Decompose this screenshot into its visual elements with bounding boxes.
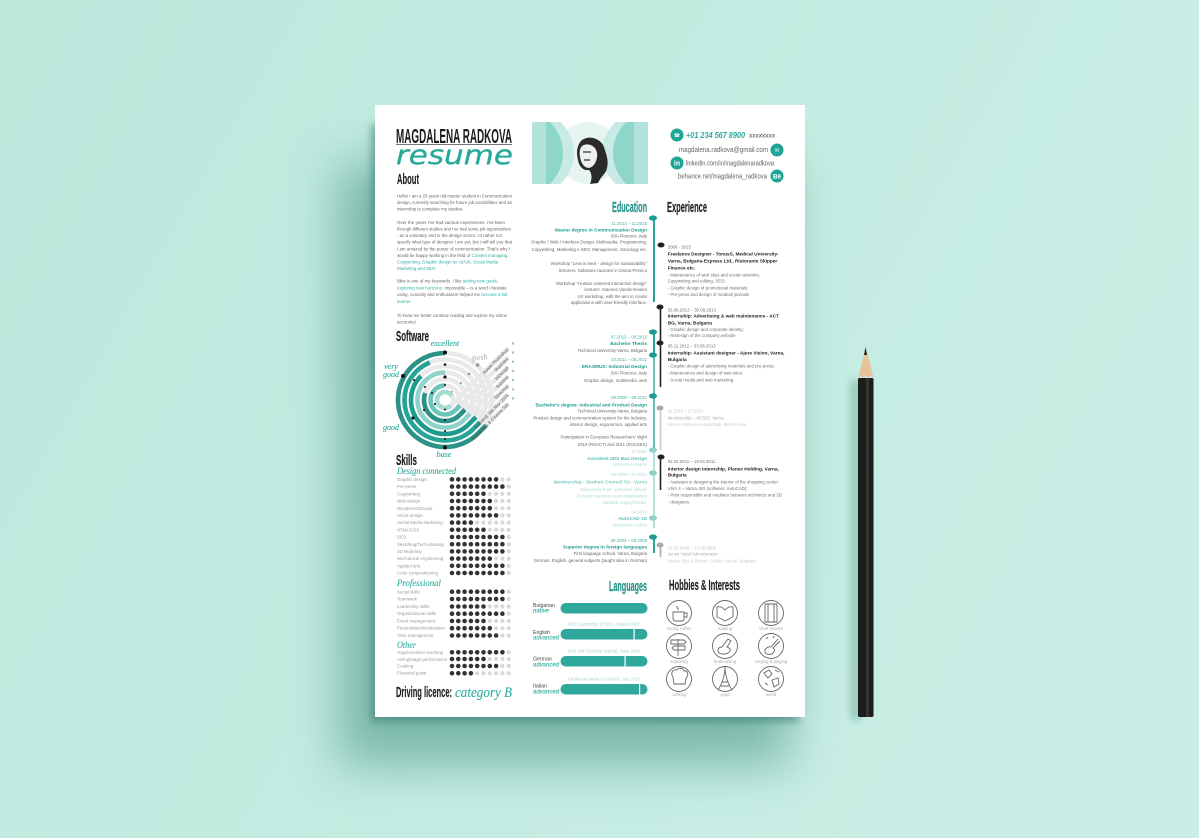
languages bars: DSd-SaF (Goethe Institut), June 2008: [568, 648, 641, 654]
experience entries: 03.06.2013 – 30.09.2013: [668, 307, 717, 312]
icon: portrait silhouette: [577, 138, 608, 184]
experience entries: BG, Varna, Bulgaria: [668, 320, 712, 326]
hobbies icon grid: yoga: [720, 692, 730, 697]
radial software chart: Sublime: [495, 374, 510, 389]
skills list: design connected: Social Media Marketing: [397, 520, 443, 525]
radial software chart: good: [383, 370, 400, 379]
radial software chart: [379, 334, 514, 466]
text block: about: - as a voluntary and in the design sector. I'd rather not: [397, 233, 503, 238]
text block: about: using, curiosity and enthusiasm helped me become a full: [397, 292, 507, 297]
skills list: design connected: Web design: [397, 499, 421, 504]
pencil: [850, 347, 874, 720]
title: resume script: resume: [396, 140, 513, 171]
skills list: design connected: Pre-press: [397, 484, 417, 489]
skills list: design connected: [397, 477, 509, 576]
languages bars: native: [533, 608, 550, 614]
skills list: other: Acting/stage performance: [397, 657, 448, 662]
contact details: behance.net/magdalena_radkova: [678, 174, 767, 180]
text block: about: accounts!: [397, 320, 416, 324]
skills list: professional: Presentation/moderation: [397, 626, 445, 631]
experience entries: VIVA 4 – Varna, BG (software: AutoCAD);: [668, 486, 747, 491]
education entries: Interactive course: [613, 523, 648, 528]
languages bars: FAE Cambridge (ESOL), August 2007: [568, 622, 641, 626]
experience entries: Internship: Advertising & web maintenance - ACT: [668, 314, 779, 320]
education entries: interior design, ergonomics, applied arts: [570, 422, 648, 427]
education entries: Participation in European Researchers' Night: [560, 435, 648, 440]
subheading: other: Other: [397, 641, 416, 651]
radial software chart: very: [384, 362, 398, 371]
hobbies icon grid: [666, 600, 788, 697]
hobbies icon grid: beatmaking: [714, 659, 737, 664]
contact details: Bē: [773, 174, 782, 180]
icon: eiffel tower: [718, 667, 732, 690]
radial software chart: InDesign: [494, 365, 510, 381]
education entries: Superior degree in foreign languages: [563, 545, 647, 551]
education entries: lecturer: Joannes Vandermeulen: [585, 287, 648, 292]
heading: Skills: Skills: [396, 452, 417, 469]
skills list: professional: Leadership skills: [397, 604, 430, 609]
education entries: Bachelor's degree: Industrial and Product Design: [536, 403, 647, 409]
text block: about: exploring new horizons. Impossible – is a word I hesitate: [397, 286, 507, 291]
radial software chart: good: [383, 423, 400, 432]
experience entries: 2008 - 2015: [668, 245, 691, 250]
education entries: Graphic / Web / Interface Design, Multimedia, Programming,: [531, 240, 647, 245]
education entries: Technical University-Varna, Bulgaria: [578, 409, 648, 414]
portrait graphic: [532, 122, 648, 184]
languages bars: advanced: [533, 636, 560, 642]
skills list: professional: Social skills: [397, 589, 420, 594]
icon: guitar: [765, 636, 780, 654]
education entries: [531, 221, 648, 563]
education entries: Interactive course: [613, 462, 648, 467]
subheading: design connected: Design connected: [396, 467, 456, 477]
education entries: Membership - Student Council TU - Varna: [554, 480, 647, 486]
text block: about: Bbw is one of my keywords; I like setting new goals,: [397, 279, 498, 284]
experience entries: Bulgaria: [668, 357, 687, 363]
skills list: professional: Event management: [397, 618, 436, 624]
languages bars: German: [533, 656, 552, 662]
skills list: professional: [397, 589, 509, 638]
icon: chef hat: [672, 668, 688, 684]
experience entries: - Print responsible and mediator between architects and 3D: [668, 493, 782, 498]
education entries: ERASMUS: Industrial Design: [582, 364, 647, 370]
radial software chart: Illustrator: [493, 356, 510, 372]
skills list: design connected: Wordpress/Drupal: [397, 506, 432, 511]
education entries: Workshop "Less is Next - design for sustainability": [551, 261, 647, 266]
hobbies icon grid: strong coffee: [667, 626, 692, 631]
heading: Hobbies and Interests: Hobbies & Interests: [669, 577, 740, 594]
heading: About: About: [397, 171, 419, 188]
education entries: lecturers: Salvatore Iaconesi e Oriana Persico: [559, 268, 648, 273]
contact details: [670, 128, 784, 182]
skills list: other: Yoga/Aerobics teaching: [397, 650, 444, 655]
radial software chart: fresh: [471, 352, 488, 363]
hobbies icon grid: world: [766, 692, 777, 697]
experience entries: [668, 245, 784, 564]
experience entries: - Assistant in designing the interior of the shopping center: [668, 480, 779, 485]
experience entries: Finance etc.: [668, 265, 695, 271]
skills list: design connected: Color compositioning: [397, 571, 439, 576]
text block: about: design, currently searching for future job possibilities and an: [397, 200, 513, 205]
education entries: Copywriting, Marketing e SEO, Management, Sociology etc.: [532, 247, 647, 252]
icon: signpost: [671, 639, 686, 656]
title: name: [396, 126, 512, 148]
skills list: design connected: HTML/CSS: [397, 527, 419, 532]
skills list: design connected: 3D Modeling: [397, 549, 422, 554]
education entries: 07.2011: [632, 449, 648, 454]
contact details: +01 234 567 8900: [686, 130, 745, 140]
education entries: applications with user-friendly interface.: [571, 300, 647, 305]
skills list: design connected: Mechanical engineering: [397, 556, 444, 561]
experience entries: Bulgaria: [668, 472, 687, 478]
text: Languages: [609, 578, 647, 595]
education entries: Product design and communication system for the industry,: [533, 416, 647, 421]
languages bars: Certificate Aveta A1 (UniFi), July 2012: [568, 676, 641, 682]
text block: about: [397, 194, 513, 324]
education entries: Master degree in Communication Design: [555, 228, 647, 234]
education entries: 07.2012 – 09.2012: [611, 335, 648, 340]
education entries: Graphic design, multimedia, web: [584, 378, 648, 383]
experience entries: Copywriting and editing, SEO;: [668, 279, 726, 284]
experience entries: Interior design internship, Planex Holding, Varna,: [668, 466, 779, 472]
skills list: other: Cooking: [397, 664, 414, 669]
text: Education: [612, 199, 647, 216]
driving licence: Driving licence:: [396, 684, 452, 701]
skills list: design connected: UI/UX design: [397, 513, 423, 518]
education entries: 09.2008 – 09.2011: [611, 395, 648, 400]
hobbies icon grid: exploring: [670, 659, 688, 664]
text block: about: I am amazed by the power of communication. That's why I: [397, 246, 510, 251]
text block: about: Copywriting, Graphic design for UI/UX, Social Media: [397, 260, 499, 265]
icon: instrument: [718, 639, 731, 654]
hobbies icon grid: short movies: [759, 626, 783, 631]
text: MAGDALENA RADKOVA: [396, 126, 512, 148]
education entries: Autodesk 3DS Max Design: [587, 456, 647, 462]
skills list: other: [397, 650, 509, 676]
languages bars: Bulgarian: [533, 603, 555, 609]
hobbies icon grid: reading: [718, 626, 733, 631]
subheading: professional: Professional: [396, 578, 441, 589]
experience entries: - Pre-press and design of medical journals: [668, 292, 750, 297]
driving licence: category B: [455, 685, 512, 701]
contact details: ☎: [674, 133, 680, 139]
experience entries: - designers: [668, 499, 690, 504]
education entries: ISIA Florence, Italy: [611, 371, 648, 376]
education entries: Workshop "Human centered interaction design": [556, 281, 647, 286]
education entries: 2010 (RSACT) and 2011 (RSCSES): [578, 442, 648, 447]
experience entries: 02.02.2011 – 19.04.2011: [668, 459, 716, 464]
education entries: 10.2011 – 08.2012: [611, 357, 648, 362]
text block: about: To know me better continue reading and explore my online: [397, 313, 508, 318]
contact details: xxxxxxxx: [749, 134, 775, 140]
experience entries: Internship: Assistant designer - Ajure Vision, Varna,: [668, 351, 784, 357]
hobbies icon grid: cooking: [672, 692, 687, 697]
experience entries: - Graphic design and corporate identity;: [668, 327, 744, 332]
hobbies icon grid: singing & playing: [755, 659, 788, 664]
radial software chart: Adobe Photoshop: [481, 347, 510, 375]
experience entries: Varna, Bulgaria-Express Ltd., Ristorante Skipper: [668, 259, 777, 265]
text block: about: would be happy working in the field of Content managing,: [397, 253, 509, 258]
heading: Software: Software: [396, 328, 429, 345]
education timeline: [649, 215, 657, 553]
skills list: professional: Organizational skills: [397, 611, 437, 616]
contact details: ✉: [775, 148, 780, 154]
skills list: design connected: Sketching/Tech-drawing: [397, 542, 444, 547]
education entries: Material, supply/shelter: [602, 500, 648, 505]
radial software chart: excellent: [431, 339, 460, 348]
education entries: 11.2013 – 11.2015: [611, 221, 648, 226]
education entries: First language school, Varna, Bulgaria: [574, 551, 648, 556]
text block: about: Over the years I've had various experiences. I've been: [397, 220, 506, 225]
experience entries: 11.2010 – 07.2011: [668, 409, 704, 414]
languages bars: English: [533, 630, 550, 636]
skills list: professional: Time management: [397, 633, 434, 638]
experience entries: - Graphic design of advertising materials and pre-press;: [668, 364, 775, 369]
skills list: other: Classical guitar: [397, 671, 427, 676]
icon: film: [765, 604, 777, 622]
experience entries: 01.07.2006 – 15.09.2006: [668, 545, 717, 550]
skills list: design connected: Applied arts: [397, 563, 421, 568]
languages bars: advanced: [533, 662, 560, 668]
radial software chart: Solidworks & Cinema 3ds: [471, 402, 510, 441]
paper sheet: [375, 105, 805, 717]
radial software chart: Sketchup: [493, 383, 510, 400]
skills list: professional: Teamwork: [397, 596, 418, 602]
skills list: design connected: Graphic design: [397, 477, 427, 482]
text block: about: learner.: [397, 299, 412, 304]
icon: reading: [717, 607, 733, 621]
education entries: AutoCAD 2D: [618, 516, 648, 522]
education entries: Concert fund and event organization: [577, 494, 648, 499]
education entries: Depositary trust - personal, deluxe: [581, 487, 648, 492]
radial software chart: Autodesk 3ds Max 2015: [473, 393, 510, 430]
experience entries: 05.11.2012 – 03.05.2013: [668, 344, 716, 349]
text block: about: Hello! I am a 25 years old master student in Communication: [397, 194, 513, 198]
experience entries: - Social media and web marketing: [668, 377, 734, 382]
experience entries: - Redesign of the company website: [668, 333, 736, 338]
education entries: 04.2010: [631, 510, 648, 515]
education entries: UX workshop, with the aim to create: [577, 294, 648, 299]
text block: about: Marketing and SEO.: [397, 266, 437, 271]
radial software chart: base: [437, 450, 452, 459]
text block: about: through different studies and I've had some job opportunities: [397, 226, 512, 231]
experience timeline: [656, 242, 664, 557]
experience entries: Hedes Spa & Resort, Golden Sands, Bulgaria: [668, 559, 756, 564]
education entries: 09.2009 – 07.2011: [611, 472, 648, 477]
contact details: linkedin.com/in/magdalenaradkova: [686, 160, 774, 168]
text: Experience: [667, 199, 707, 216]
contact details: in: [674, 160, 680, 168]
education entries: ISIA Florence, Italy: [611, 234, 648, 239]
experience entries: Interne Indiunas Intoambiak, Belsuh asia: [668, 422, 747, 427]
languages bars: advanced: [533, 690, 560, 696]
experience entries: Junior Hotel Administrator: [668, 552, 718, 557]
text block: about: specify what type of designer I am yet, but I will tell you that: [397, 240, 513, 245]
languages bars: Italian: [533, 684, 547, 690]
icon: world: [764, 670, 779, 687]
skills list: design connected: SEO: [397, 535, 407, 540]
education entries: Bachelor Thesis: [610, 341, 647, 347]
text block: about: internship to complete my studies.: [397, 207, 463, 212]
paper shadow: [338, 125, 799, 765]
education entries: Technical University-Varna, Bulgaria: [578, 348, 648, 353]
education entries: 09.2003 – 06.2008: [611, 538, 648, 543]
education entries: German, English, general subjects (taught also in German): [534, 558, 648, 563]
skills list: design connected: Copywriting: [397, 491, 420, 496]
experience entries: Membership - AIESEC Varna: [668, 415, 724, 420]
contact details: magdalena.radkova@gmail.com: [679, 147, 768, 154]
experience entries: - Maintenance of web sites and social networks;: [668, 272, 760, 277]
icon: coffee: [673, 606, 687, 621]
experience entries: Freelance Designer - TonusS, Medical University-: [668, 251, 779, 257]
experience entries: - Maintenance and design of web sites;: [668, 370, 743, 375]
languages bars: [533, 603, 648, 696]
experience entries: - Graphic design of promotional materials;: [668, 285, 748, 290]
